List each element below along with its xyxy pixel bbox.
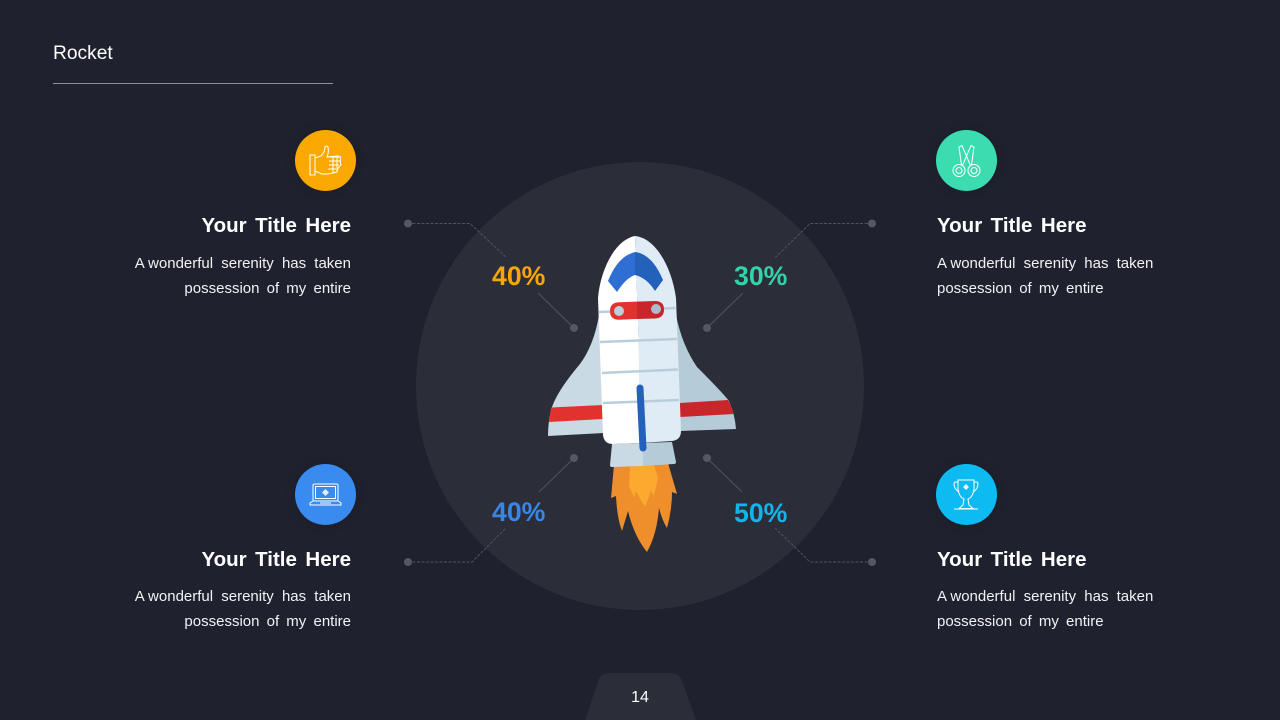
nose arch: [608, 252, 635, 292]
item description: possession of my entire: [184, 613, 351, 630]
item description: [937, 255, 1153, 297]
rocket body: [598, 236, 640, 444]
background circle: [416, 162, 864, 610]
leader: top left: [404, 220, 578, 332]
item title: Your Title Here: [937, 548, 1087, 571]
item description: [937, 588, 1153, 630]
item title: Your Title Here: [201, 548, 351, 571]
page number tab: 14: [631, 689, 649, 706]
percentage: top left 40%: 40%: [492, 261, 545, 291]
heading: Rocket: Rocket: [53, 43, 113, 64]
item description: possession of my entire: [937, 280, 1104, 297]
engine nozzle: [610, 443, 644, 467]
item description: A wonderful serenity has taken: [937, 255, 1153, 272]
window band: [610, 301, 664, 320]
page number tab: [585, 673, 696, 720]
item description: possession of my entire: [937, 613, 1104, 630]
inner flame: [629, 465, 658, 507]
center bar: [640, 388, 643, 448]
item title: Your Title Here: [201, 214, 351, 237]
icon: laptop: [284, 452, 368, 536]
item description: [135, 588, 351, 630]
right wing: [676, 315, 736, 431]
percentage: top right 30%: 30%: [734, 261, 787, 291]
flame: [611, 463, 677, 552]
item description: A wonderful serenity has taken: [135, 255, 351, 272]
icon: scissors: [924, 118, 1008, 202]
leader: bottom left: [404, 454, 578, 566]
item title: Your Title Here: [937, 214, 1087, 237]
percentage: bottom right 50%: 50%: [734, 498, 787, 528]
rocket illustration: [548, 236, 736, 552]
body seams: [599, 308, 679, 403]
item description: A wonderful serenity has taken: [937, 588, 1153, 605]
item: bottom right: [924, 452, 1153, 630]
left wing: [548, 315, 604, 436]
item description: possession of my entire: [184, 280, 351, 297]
leader: bottom right: [703, 454, 876, 566]
icon: thumbs up: [284, 118, 368, 202]
item: top left: [135, 118, 368, 297]
leader: top right: [703, 220, 876, 332]
icon: trophy: [924, 452, 1008, 536]
item description: [135, 255, 351, 297]
percentage: bottom left 40%: 40%: [492, 497, 545, 527]
wing stripes: [549, 405, 603, 422]
item: top right: [924, 118, 1153, 297]
item: bottom left: [135, 452, 368, 630]
item description: A wonderful serenity has taken: [135, 588, 351, 605]
